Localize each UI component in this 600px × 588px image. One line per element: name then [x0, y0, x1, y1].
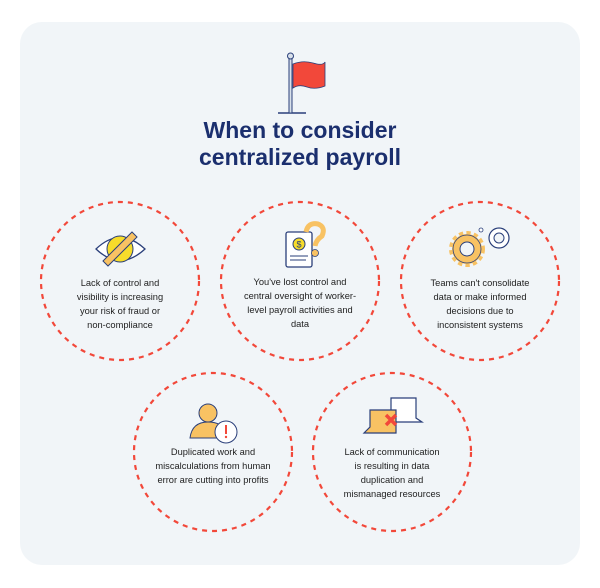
- text: systems: inconsistent systems: [437, 320, 523, 330]
- text: communication: duplication and: [361, 475, 423, 485]
- text: fraud: visibility is increasing: [77, 292, 163, 302]
- text: communication: mismanaged resources: [344, 489, 440, 499]
- icon: document with dollar and question: $: [296, 240, 302, 250]
- icon: eye crossed: [96, 232, 145, 266]
- text: oversight: central oversight of worker-: [244, 291, 356, 301]
- text: errors: [155, 447, 271, 485]
- text: systems: Teams can't consolidate: [431, 278, 529, 288]
- text: fraud: your risk of fraud or: [80, 306, 160, 316]
- icon: document with dollar and question: [286, 224, 323, 267]
- text: communication: [344, 447, 440, 499]
- text: oversight: data: [291, 319, 309, 329]
- text: fraud: Lack of control and: [81, 278, 159, 288]
- icon: gears: [452, 228, 509, 264]
- icon: red flag: [278, 52, 326, 114]
- title: [199, 117, 401, 170]
- text: fraud: [76, 278, 163, 330]
- text: communication: is resulting in data: [355, 461, 429, 471]
- text: oversight: You've lost control and: [254, 277, 346, 287]
- text: oversight: [244, 277, 356, 329]
- icon: person with alert: [190, 404, 237, 443]
- text: errors: Duplicated work and: [171, 447, 255, 457]
- title: When to consider: [204, 117, 396, 143]
- icon: chat bubbles with X: [364, 398, 422, 433]
- text: systems: data or make informed: [433, 292, 526, 302]
- text: errors: error are cutting into profits: [157, 475, 269, 485]
- text: oversight: level payroll activities and: [247, 305, 353, 315]
- text: systems: [430, 278, 529, 330]
- title: centralized payroll: [199, 144, 401, 170]
- text: systems: decisions due to: [446, 306, 514, 316]
- text: communication: Lack of communication: [344, 447, 440, 457]
- text: fraud: non-compliance: [87, 320, 153, 330]
- text: errors: miscalculations from human: [155, 461, 271, 471]
